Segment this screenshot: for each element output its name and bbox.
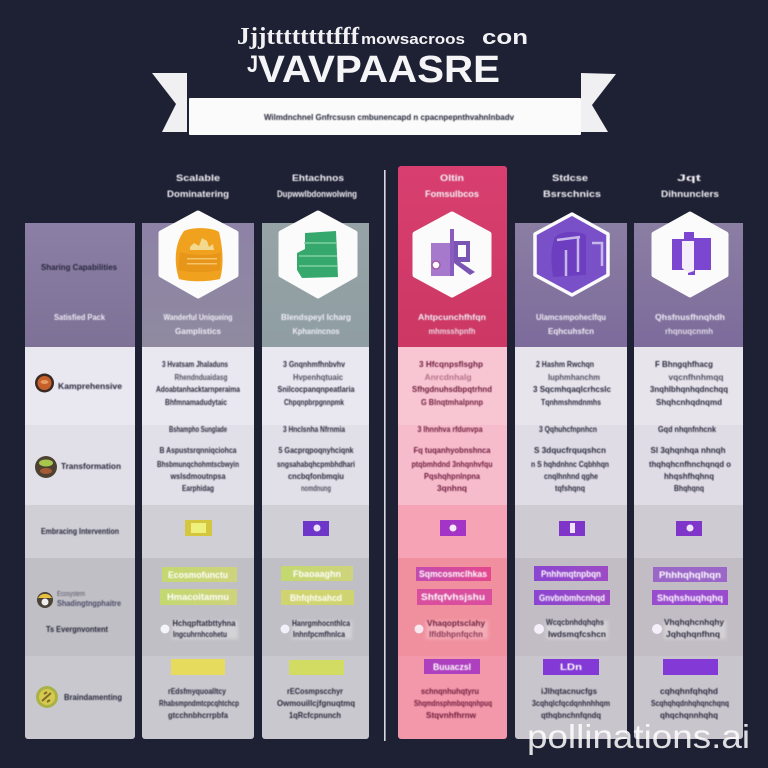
bottom text: iJlhqtacnucfgs	[541, 686, 597, 696]
column heading: Dupwwlbdonwolwing	[277, 189, 357, 200]
rating badge	[303, 521, 329, 536]
column heading: Fomsulbcos	[425, 189, 479, 200]
row two text: tqfshqnq	[555, 483, 585, 493]
bottom text: 1qRcfcpnunch	[289, 710, 341, 720]
icon: brown circle	[35, 374, 54, 392]
icon: green arrows circle	[36, 686, 58, 708]
feature pills: Bhfqhtsahcd	[290, 593, 342, 603]
bottom text: gtcchnbhcrrpbfa	[168, 710, 228, 720]
row one text: 3 Hvatsam Jhaladuns	[162, 359, 228, 369]
column heading: Oltin	[440, 173, 464, 184]
bottom text: Owmouillcjfgnuqtmq	[277, 698, 355, 708]
bottom text: Scqhqhqdnhqhqnchqnq	[651, 698, 729, 708]
row one text	[156, 359, 240, 407]
label: row four: Ecosystem	[57, 591, 85, 598]
row two text: Fq tuqanhyobnshnca	[414, 445, 491, 455]
row two text: Bhsbmunqchohmtscbwyin	[157, 459, 239, 469]
row two text: 3 Qqhuhcfnpnhcn	[539, 424, 597, 434]
row two text: Gqd nhqnfnhcnk	[658, 424, 716, 434]
row one text	[533, 359, 611, 407]
feature pills	[534, 566, 610, 605]
row one text: G Blnqtmhalpnnp	[421, 397, 483, 407]
bullet note	[414, 618, 488, 639]
panel: row label column	[25, 223, 135, 739]
status bar: Buuaczsl	[433, 662, 471, 672]
bullet note: Hanrgmhocnthlca	[292, 618, 350, 628]
ribbon subtitle: Wilmdnchnel Gnfrcsusn cmbunencapd n cpacnpepnthvahnlnbadv	[264, 112, 514, 122]
bottom text: cqhqhnfqhqhd	[660, 686, 718, 696]
vertical divider	[384, 170, 386, 741]
bullet note	[652, 617, 726, 639]
icon: green circle	[35, 456, 57, 478]
bottom text: qthqbnchnfqndq	[541, 710, 601, 720]
feature pills: Pnhhmqtnpbqn	[541, 569, 601, 579]
column heading: Scalable	[176, 173, 220, 184]
bottom text: 3cqhqlcfqcdqnhnhhqm	[532, 698, 610, 708]
row one text: Tqnhmshmdnmhs	[541, 397, 601, 407]
bottom text	[414, 686, 492, 720]
row one text: Rhendnduaidasg	[174, 372, 228, 382]
label: row five: Braindamenting	[64, 693, 122, 702]
row two text: ptqbmhdnd 3nhqnhvfqu	[412, 459, 492, 469]
column heading: Stdcse	[552, 173, 588, 184]
column sub heading: Blendspeyl Icharg	[281, 312, 351, 322]
row one text	[278, 359, 355, 407]
row two text: thqhqhcnfhnchqnqd o	[649, 459, 731, 469]
row two text: 3 Hnclsnha Nfrnmia	[283, 424, 345, 434]
column sub heading: Ahtpcunchfhfqn	[418, 312, 486, 322]
row one text	[412, 359, 492, 407]
row two text	[277, 424, 355, 493]
icon: yellow and dark circle	[37, 592, 53, 608]
row two text: Bhqhqnq	[674, 483, 704, 493]
bullet note: Vhqhqhcnhqhy	[664, 617, 724, 627]
row two text	[649, 424, 731, 493]
row two text: cnqlhnhnd qghe	[544, 471, 598, 481]
icon: green backpack hexagon	[281, 213, 355, 296]
row one text: 2 Hashm Rwchqn	[536, 359, 594, 369]
bullet note	[280, 618, 352, 639]
title line one: Jjjttttttttfff	[237, 24, 360, 50]
column heading	[277, 173, 357, 200]
watermark: pollinations.ai	[527, 718, 750, 755]
bullet note: Hchqpftatbttyhna	[172, 618, 236, 628]
bullet note: Inhnfpcmfhnlca	[293, 629, 345, 639]
row one text: Shqhcnhqdnqmd	[656, 397, 722, 407]
row one text	[650, 359, 728, 407]
label: row four	[57, 591, 121, 608]
panel: column three (highlighted pink)	[398, 166, 507, 739]
row one text: 3 Sqcmhqaqlcrhcslc	[533, 384, 611, 394]
bottom text: qhqchqnnhqhq	[660, 710, 718, 720]
rating badge	[676, 521, 702, 536]
status bar	[289, 660, 344, 675]
column heading	[661, 173, 719, 200]
ribbon right tail	[581, 73, 616, 132]
column sub heading: Kphanincnos	[292, 326, 340, 336]
feature pills: Ecosmofunctu	[168, 570, 228, 580]
row two text: B Aspustsrqnniqciohca	[160, 445, 237, 455]
ribbon body	[189, 98, 581, 135]
row one text: Hvpenhqtuaic	[293, 372, 343, 382]
panel: column two (green)	[262, 173, 369, 739]
row two text: 3 Ihnnhva rfdunvpa	[418, 424, 483, 434]
bottom text	[651, 686, 729, 720]
bottom text	[159, 686, 239, 720]
ribbon left tail	[152, 73, 187, 132]
row two text	[412, 424, 492, 493]
bullet note: Iwdsmqfcshcn	[548, 629, 606, 639]
label: row two: Transformation	[61, 462, 121, 471]
column sub heading	[164, 312, 232, 336]
column heading	[425, 173, 479, 200]
bottom text: Rhabsmpndmtcpcqhtchcp	[159, 698, 239, 708]
row two text: S 3dqucfrquqshcn	[534, 445, 606, 455]
main title: VAVPAASRE	[258, 49, 500, 91]
row two text: Earphidag	[182, 483, 214, 493]
column heading	[167, 173, 229, 200]
row one text: Anrcdnhalg	[424, 372, 472, 382]
row one text: 3nqhlbhqnhqdnchqq	[650, 384, 728, 394]
column sub heading: Eqhcuhsfcn	[548, 326, 594, 336]
bullet note: Wcqcbnhdqhqhs	[546, 617, 604, 627]
row one text: Adoabtanhacktarnperaima	[156, 384, 240, 394]
bullet note	[160, 618, 238, 639]
feature pills: Shqhshuqhqhq	[657, 593, 723, 603]
row one text: Bhfmnamadudytaic	[165, 397, 227, 407]
feature pills: Sqmcosmclhkas	[419, 569, 487, 579]
icon: purple square hexagon	[654, 214, 726, 295]
row one text: Sfhgdnuhsdbpqtrhnd	[412, 384, 492, 394]
bullet note: Ifldbhpnfqchn	[429, 629, 483, 639]
bottom text: Shqmdnsphmbqnqnhpuq	[414, 698, 492, 708]
icon: purple filled hexagon	[535, 214, 608, 295]
row two text: Bshampho Sunglade	[169, 424, 227, 434]
title line one small part: mowsacroos	[361, 31, 465, 48]
row one text: vqcnfhnhmqq	[668, 372, 724, 382]
title block	[237, 24, 528, 91]
icon: orange backpack hexagon	[161, 213, 236, 296]
bottom text	[277, 686, 355, 720]
status bar	[543, 659, 599, 675]
status bar	[171, 659, 225, 675]
feature pills: Gnvbnbmhcnhqd	[539, 593, 605, 603]
feature pills: Hmacoitamnu	[167, 592, 229, 602]
feature pills	[416, 567, 492, 605]
column heading: Jqt	[677, 173, 702, 184]
bottom text: Stqvnhfhrnw	[426, 710, 476, 720]
title line one suffix: con	[482, 27, 528, 49]
panel: column four (filled purple)	[515, 173, 627, 739]
feature pills: Shfqfvhsjshu	[421, 592, 485, 602]
column sub heading: mhmsshpnfh	[428, 326, 476, 336]
row one text: Iuphmhanchm	[548, 372, 600, 382]
column heading: Ehtachnos	[292, 173, 344, 184]
column sub heading: Wanderful Uniqueing	[164, 312, 232, 322]
panel: column five (purple outline)	[634, 173, 743, 739]
status bar: LDn	[560, 662, 582, 672]
column heading: Dihnunclers	[661, 189, 719, 200]
status bar	[424, 659, 480, 674]
column sub heading	[536, 312, 606, 336]
row two text: cncbqfonbmqiu	[288, 471, 344, 481]
row two text	[531, 424, 609, 493]
feature pills: Fbaoaaghn	[293, 569, 341, 579]
feature pills	[281, 566, 354, 605]
label: top sub heading: Satisfied Pack	[54, 313, 106, 322]
column sub heading	[418, 312, 486, 336]
column heading: Bsrschnics	[543, 189, 601, 200]
rating badge	[185, 520, 212, 536]
label: top heading: Sharing Capabilities	[41, 263, 118, 272]
row one text: 3 Hfcqnpsflsghp	[419, 359, 483, 369]
row one text: 3 Gnqnhmfhnbvhv	[283, 359, 345, 369]
bullet note: Vhaqoptsclahy	[427, 618, 485, 628]
bullet note: Jqhqhqnfhnq	[666, 629, 720, 639]
column sub heading: rhqnuqcnmh	[665, 326, 713, 336]
row two text: nomdnung	[301, 483, 331, 493]
column heading	[543, 173, 601, 200]
bottom text: rEdsfmyquoalltcy	[168, 686, 226, 696]
bottom text: rECosmpscchyr	[287, 686, 344, 696]
column sub heading: Ulamcsmpoheclfqu	[536, 312, 606, 322]
column sub heading: Gamplistics	[175, 326, 221, 336]
label: row four: Shadingtngphaitre	[57, 599, 121, 608]
panel: column one (orange)	[142, 173, 254, 739]
feature pills	[160, 567, 237, 605]
feature pills: Phhhqhqlhqn	[659, 570, 721, 580]
row two text	[157, 424, 239, 493]
column heading: Dominatering	[167, 189, 229, 200]
bottom text: schnqnhuhqtyru	[421, 686, 479, 696]
label: row four secondary: Ts Evergnvontent	[46, 625, 108, 634]
title initial: J	[247, 51, 258, 78]
column sub heading	[655, 312, 725, 336]
row one text: Snilcocpanqnpeatlaria	[278, 384, 355, 394]
row two text: 5 Gacprqpoqnyhciqnk	[278, 445, 354, 455]
icon: purple emblem hexagon	[415, 214, 489, 295]
bottom text	[532, 686, 610, 720]
bullet note	[534, 617, 608, 639]
rating badge	[440, 520, 466, 536]
column sub heading	[281, 312, 351, 336]
row one text: Chpqnpbrpgnnpmk	[284, 397, 344, 407]
row one text: F Bhngqhfhacg	[655, 359, 713, 369]
label: row three: Embracing Intervention	[41, 527, 119, 536]
column sub heading: Qhsfnusfhnqhdh	[655, 312, 725, 322]
row two text: n S hqhdnhnc Cqbhhqn	[531, 459, 609, 469]
row two text: Pqshqhpnlnpna	[424, 471, 480, 481]
feature pills	[652, 567, 728, 605]
ribbon banner	[152, 73, 616, 135]
status bar	[663, 659, 718, 675]
row two text: Sl 3qhqnhqa nhnqh	[650, 445, 726, 455]
row two text: 3qnhnq	[437, 483, 467, 493]
rating badge	[559, 521, 585, 536]
bullet note: Ingcuhrnhcohetu	[173, 629, 227, 639]
row two text: sngsahabqhcpmbhdhari	[277, 459, 355, 469]
row two text: wslsdmoutnpsa	[170, 471, 226, 481]
label: row one: Kamprehensive	[58, 382, 123, 391]
row two text: hhqshfhqhnq	[664, 471, 714, 481]
